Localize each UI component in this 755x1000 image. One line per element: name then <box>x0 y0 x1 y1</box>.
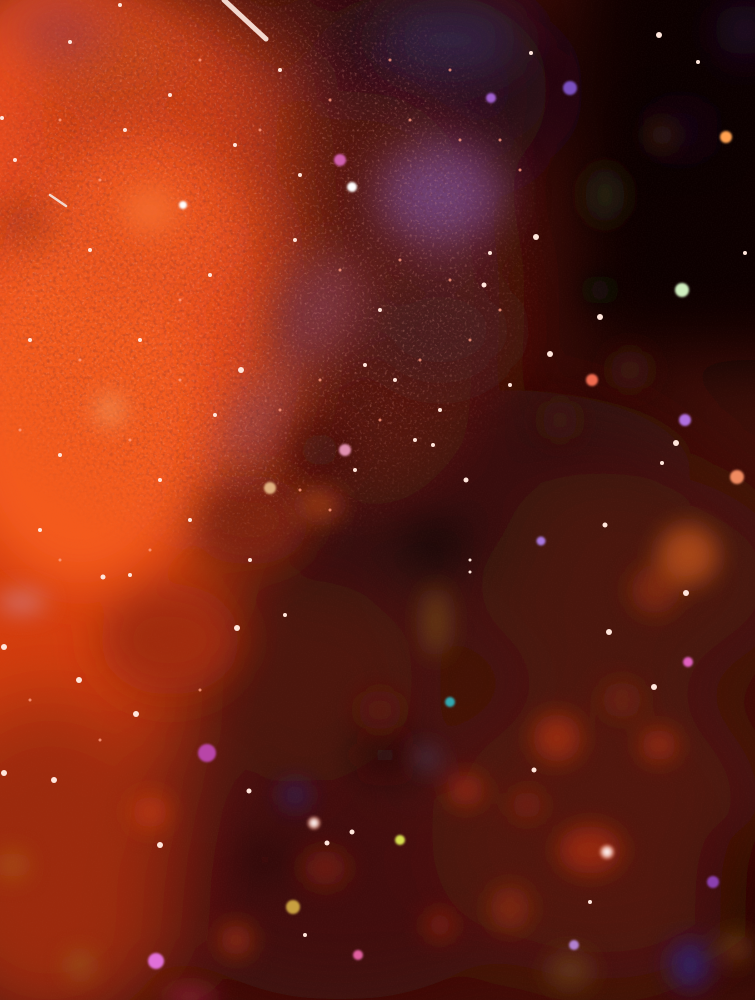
white streaks <box>50 0 266 206</box>
orange nebula core <box>0 2 310 695</box>
dark dust patches <box>253 428 461 876</box>
nebula grain texture <box>0 0 542 548</box>
large stars <box>148 81 744 969</box>
coloured faint stars <box>18 58 522 742</box>
purple gas clouds <box>212 4 755 477</box>
